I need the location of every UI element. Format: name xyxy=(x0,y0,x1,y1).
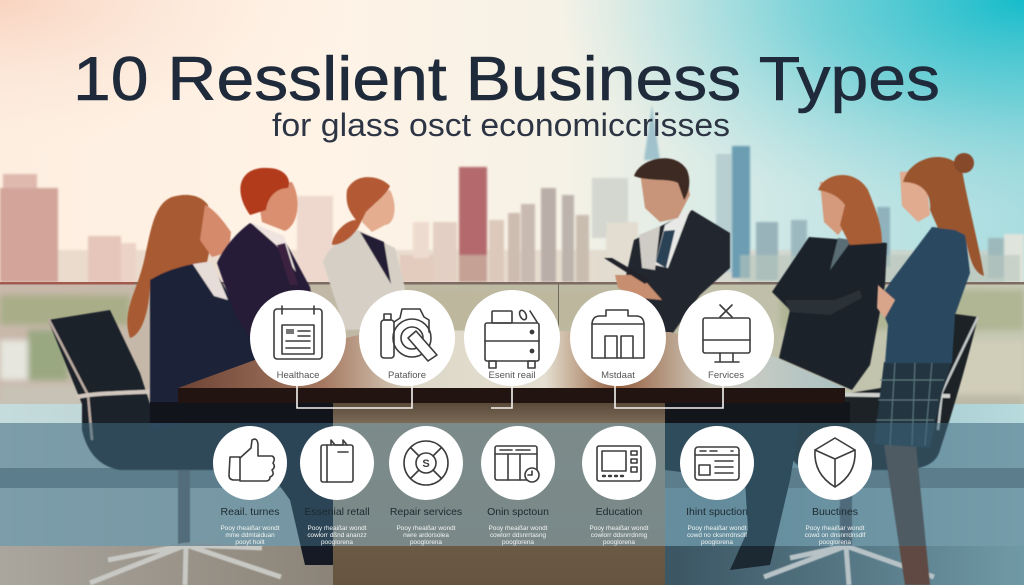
node: Reail. turnes xyxy=(213,426,287,546)
node: Fervices: Fervices xyxy=(708,370,744,381)
icon: thumbs up xyxy=(229,439,274,481)
node: Reail. turnes: mme ddmtaiduan xyxy=(225,532,275,539)
node: Buuctines: pooglorena xyxy=(819,539,851,546)
node: Essenial retall: pooglorena xyxy=(321,539,353,546)
background: city skyline xyxy=(0,105,1024,285)
node: Essenial retall: cowlorr dßnd ananzz xyxy=(307,532,367,539)
node: Repair services: S xyxy=(422,458,430,470)
icon: shield cube xyxy=(815,438,855,487)
icon: monitor xyxy=(703,305,750,362)
node: Healthace: Healthace xyxy=(277,370,319,381)
node: Reail. turnes: Pooy rheaißar wondt xyxy=(221,525,280,532)
node: Repair services: Pooy rheaißar wondt xyxy=(397,525,456,532)
icon: web page xyxy=(695,447,739,480)
title: 10 Resslient Business Types xyxy=(73,45,940,114)
icon: camera with bottle and hand xyxy=(381,309,437,361)
node: Healthace xyxy=(250,290,346,386)
node: Patafiore: Patafiore xyxy=(388,370,426,381)
node: Ihint spuction: pooglorena xyxy=(701,539,733,546)
node: Buuctines: Pooy rheaißar wondt xyxy=(806,525,865,532)
node: Onin spctoun: pooglorena xyxy=(502,539,534,546)
person: woman with crossed arms xyxy=(772,175,887,390)
icon: storefront xyxy=(592,310,644,358)
node: Buuctines: Buuctines xyxy=(812,506,858,518)
left chair xyxy=(48,310,281,585)
person: man standing with phone xyxy=(604,158,730,340)
node: Education: cowlorr ddsnrrdnmg xyxy=(591,532,648,539)
background: city below balcony xyxy=(0,282,1024,424)
node: Fervices xyxy=(678,290,774,386)
node: Ihint spuction: cowd no cksnrrdnsdlf xyxy=(687,532,747,539)
person: woman seated left xyxy=(127,195,262,430)
node: Repair services xyxy=(389,426,463,546)
node: Onin spctoun: Onin spctoun xyxy=(487,506,549,518)
node: Esenit reail xyxy=(464,290,560,386)
node: Ihint spuction: Pooy rheaißar wondt xyxy=(688,525,747,532)
node: Patafiore xyxy=(359,290,455,386)
node: Buuctines: cowd on dnsnrrdnsdlf xyxy=(805,532,866,539)
icon: dollar wheel xyxy=(404,441,448,485)
connector lines xyxy=(297,385,723,408)
node: Onin spctoun: cowlorr ddsnrrtasng xyxy=(490,532,547,539)
icon: oven screen xyxy=(597,446,641,481)
icon: calendar xyxy=(274,306,322,359)
node: Essenial retall xyxy=(300,426,374,546)
subtitle: for glass osct economiccrisses xyxy=(272,107,730,143)
wall and floor xyxy=(0,404,1024,585)
node: Repair services: pooglorena xyxy=(410,539,442,546)
node: Education: Education xyxy=(596,506,643,518)
node: Repair services: Repair services xyxy=(390,506,462,518)
node: Ihint spuction xyxy=(680,426,754,546)
node: Education: Pooy rheaißar wondt xyxy=(590,525,649,532)
right chair xyxy=(764,313,978,585)
person: woman standing right xyxy=(874,153,984,585)
node: Onin spctoun: Pooy rheaißar wondt xyxy=(489,525,548,532)
node: Esenit reail: Esenit reail xyxy=(488,370,536,381)
background: sky xyxy=(0,0,1024,300)
person: woman in beige blazer xyxy=(323,177,405,330)
node: Mstdaat: Mstdaat xyxy=(601,370,635,381)
node: Essenial retall: Essenial retall xyxy=(304,506,370,518)
node: Essenial retall: Pooy rheaißar wondt xyxy=(308,525,367,532)
node: Education: pooglorena xyxy=(603,539,635,546)
node: Onin spctoun xyxy=(481,426,555,546)
node: Reail. turnes: pooyt hoilt xyxy=(235,539,265,546)
icon: clipboard bag xyxy=(321,440,353,482)
translucent panel band xyxy=(0,423,1024,546)
node: Reail. turnes: Reail. turnes xyxy=(221,506,279,518)
node: Mstdaat xyxy=(570,290,666,386)
node: Buuctines xyxy=(798,426,872,546)
icon: browser clock xyxy=(495,446,539,482)
node: Ihint spuction: Ihint spuction xyxy=(686,506,748,518)
person: man seated xyxy=(217,168,318,345)
conference table xyxy=(178,330,845,585)
icon: cabinet xyxy=(485,309,539,368)
under-table shadow xyxy=(150,402,850,570)
node: Repair services: nwre ardorsolea xyxy=(403,532,449,539)
node: Education xyxy=(582,426,656,546)
